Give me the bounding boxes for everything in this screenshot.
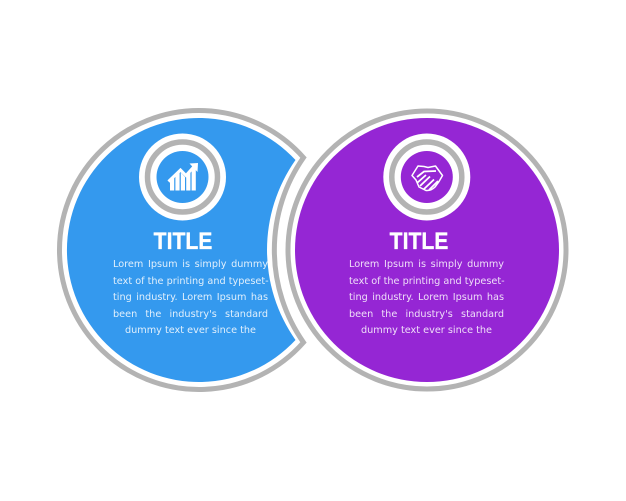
text block: right description: Lorem Ipsum is simply dummy [349,259,504,270]
text block: left description: dummy text ever since the [125,325,256,336]
text block: right description [349,259,505,336]
heading: right title: TITLE [390,228,448,255]
text block: right description: dummy text ever since the [361,325,492,336]
text block: left description: Lorem Ipsum is simply dummy [113,259,268,270]
text block: left description [113,259,269,336]
text block: left description: ting industry. Lorem Ipsum has [113,292,268,303]
icon: handshake badge [383,134,470,220]
panel: left blue crescent [59,111,304,390]
text block: right description: been the industry's standard [349,309,504,320]
text block: right description: text of the printing and typeset- [349,276,505,287]
icon: growth chart badge [139,134,226,220]
heading: left title: TITLE [154,228,212,255]
panel: right purple circle [288,111,566,389]
text block: left description: been the industry's standard [113,309,268,320]
text block: right description: ting industry. Lorem Ipsum has [349,292,504,303]
text block: left description: text of the printing and typeset- [113,276,269,287]
